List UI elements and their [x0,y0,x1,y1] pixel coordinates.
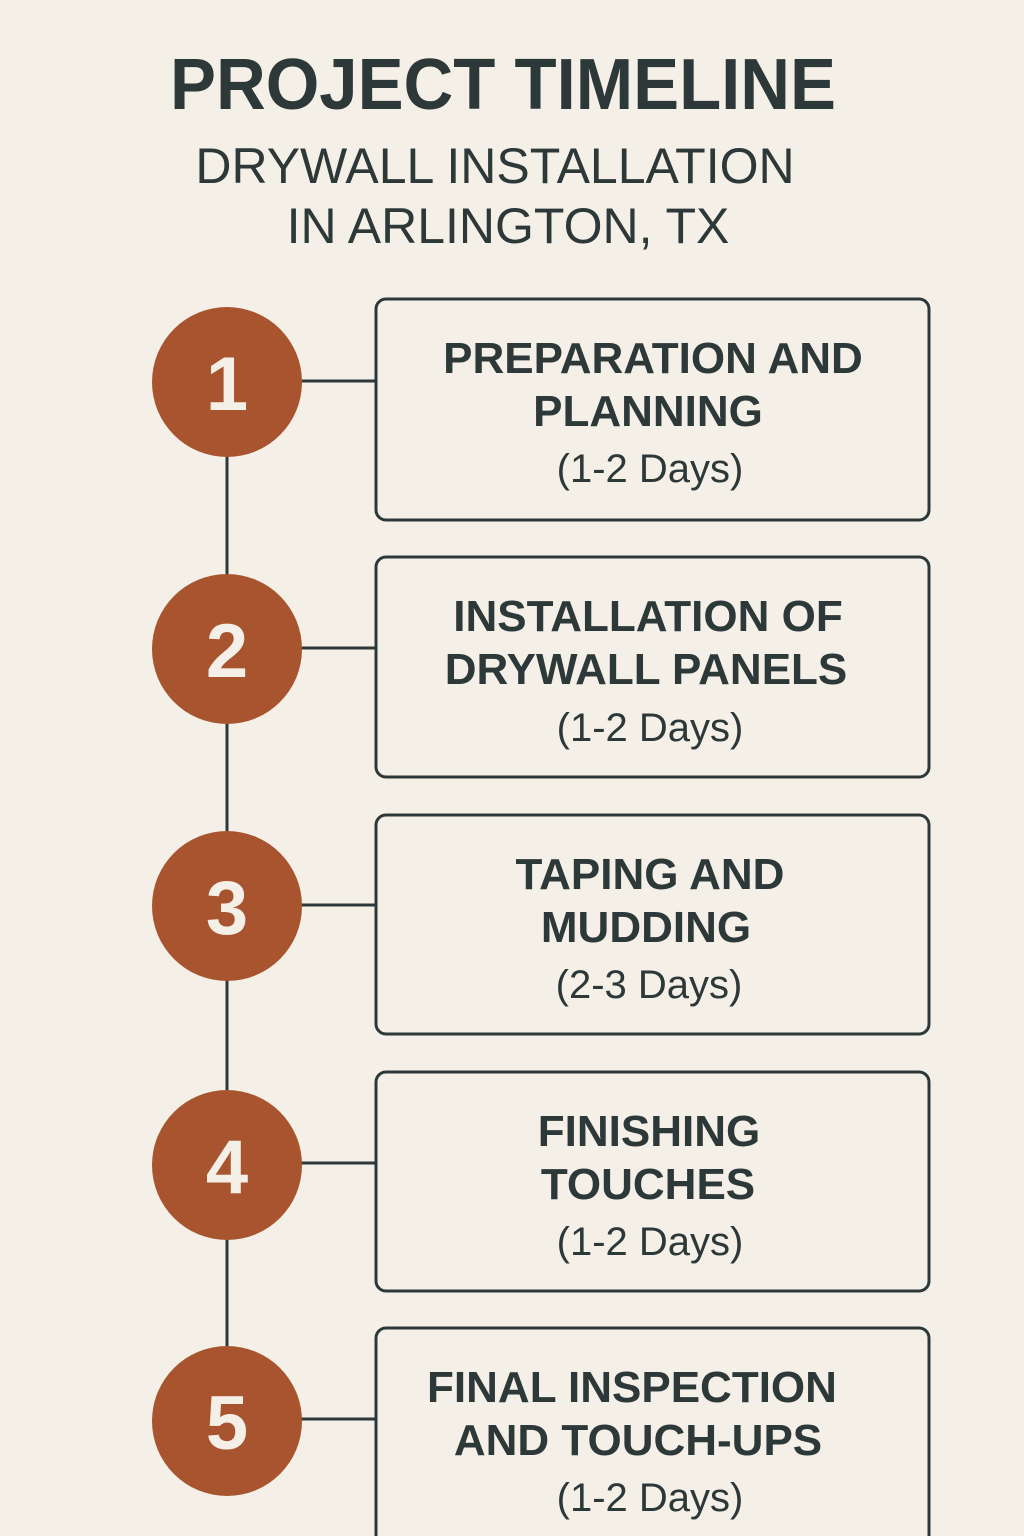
title: PROJECT TIMELINE [170,45,836,125]
box: final inspection and touch-ups: FINAL INSPECTION [427,1363,837,1412]
icon: circle 4: 4 [206,1125,248,1210]
box: taping and mudding: TAPING AND [516,850,784,899]
icon: circle 2: 2 [206,609,248,694]
box: preparation and planning [376,299,929,520]
box: preparation and planning: PLANNING [533,387,763,436]
box: finishing touches [376,1072,929,1291]
step 1 [152,299,929,520]
box: taping and mudding: (2-3 Days) [556,963,742,1007]
box: installation of drywall panels: (1-2 Days) [557,706,743,750]
box: taping and mudding [376,815,929,1034]
box: finishing touches: TOUCHES [541,1160,755,1209]
box: preparation and planning: PREPARATION AND [443,334,863,383]
box: finishing touches: FINISHING [538,1107,760,1156]
box: installation of drywall panels: DRYWALL PANELS [445,645,847,694]
icon: circle 5 [152,1346,302,1496]
box: final inspection and touch-ups: (1-2 Days) [557,1476,743,1520]
step 2 [152,557,929,777]
icon: circle 1 [152,307,302,457]
box: installation of drywall panels: INSTALLATION OF [453,592,843,641]
icon: circle 3: 3 [206,866,248,951]
step 3 [152,815,929,1034]
icon: circle 2 [152,574,302,724]
box: preparation and planning: (1-2 Days) [557,447,743,491]
icon: circle 1: 1 [206,342,248,427]
step 5 [152,1328,929,1536]
box: final inspection and touch-ups [376,1328,929,1536]
timeline vertical line [226,382,228,1421]
icon: circle 4 [152,1090,302,1240]
box: finishing touches: (1-2 Days) [557,1220,743,1264]
step 4 [152,1072,929,1291]
icon: circle 3 [152,831,302,981]
box: final inspection and touch-ups: AND TOUCH-UPS [454,1416,822,1465]
box: taping and mudding: MUDDING [541,903,751,952]
icon: circle 5: 5 [206,1381,248,1466]
subtitle: IN ARLINGTON, TX [287,198,729,254]
box: installation of drywall panels [376,557,929,777]
subtitle [195,138,795,254]
subtitle: DRYWALL INSTALLATION [195,138,795,194]
